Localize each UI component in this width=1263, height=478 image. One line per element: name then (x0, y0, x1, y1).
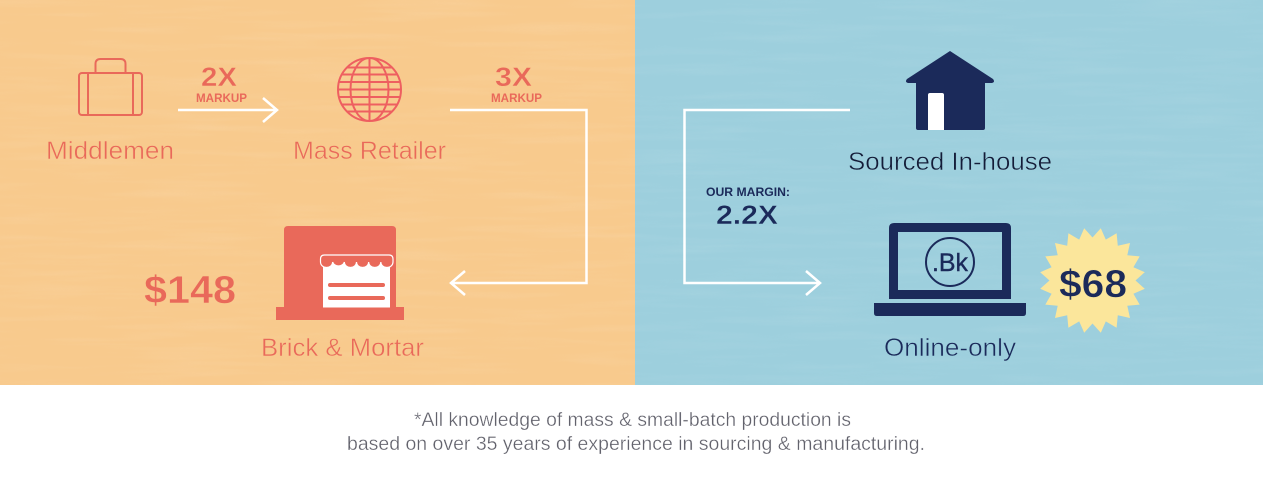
icon: globe (338, 58, 401, 121)
arrow: middlemen to mass retailer (178, 98, 277, 122)
icon: house (906, 51, 994, 130)
label: Mass Retailer: Mass Retailer (293, 137, 446, 165)
label: Middlemen: Middlemen (46, 137, 174, 165)
icon: storefront (276, 226, 404, 320)
label: 3X markup: MARKUP (491, 91, 542, 105)
label: our margin: 2.2X (716, 200, 778, 230)
arrow: mass retailer to brick and mortar (450, 110, 586, 295)
label: Brick & Mortar: Brick & Mortar (261, 334, 424, 362)
label: 2X markup (196, 62, 247, 105)
label: 3X markup (491, 62, 542, 105)
footnote: *All knowledge of mass & small-batch production is (414, 410, 851, 431)
icon: laptop: .Bk (932, 249, 968, 277)
label: 2X markup: 2X (201, 62, 237, 92)
label: 3X markup: 3X (495, 62, 532, 92)
label: Online-only: Online-only (884, 334, 1017, 362)
label: our margin: OUR MARGIN: (706, 185, 790, 199)
label: Sourced In-house: Sourced In-house (848, 148, 1052, 176)
arrow: sourced in-house to online-only (684, 110, 850, 295)
icon: suitcase (79, 59, 142, 115)
footnote (347, 410, 925, 455)
label: our margin (706, 185, 790, 230)
icon: laptop (874, 223, 1026, 316)
footnote: based on over 35 years of experience in sourcing & manufacturing. (347, 434, 925, 455)
panel: online-only path (635, 0, 1263, 385)
panel: brick and mortar path (0, 0, 635, 385)
badge: $68 starburst: $68 (1059, 263, 1127, 306)
badge: $68 starburst (1040, 228, 1145, 333)
price: $148: $148 (144, 269, 236, 312)
label: 2X markup: MARKUP (196, 91, 247, 105)
